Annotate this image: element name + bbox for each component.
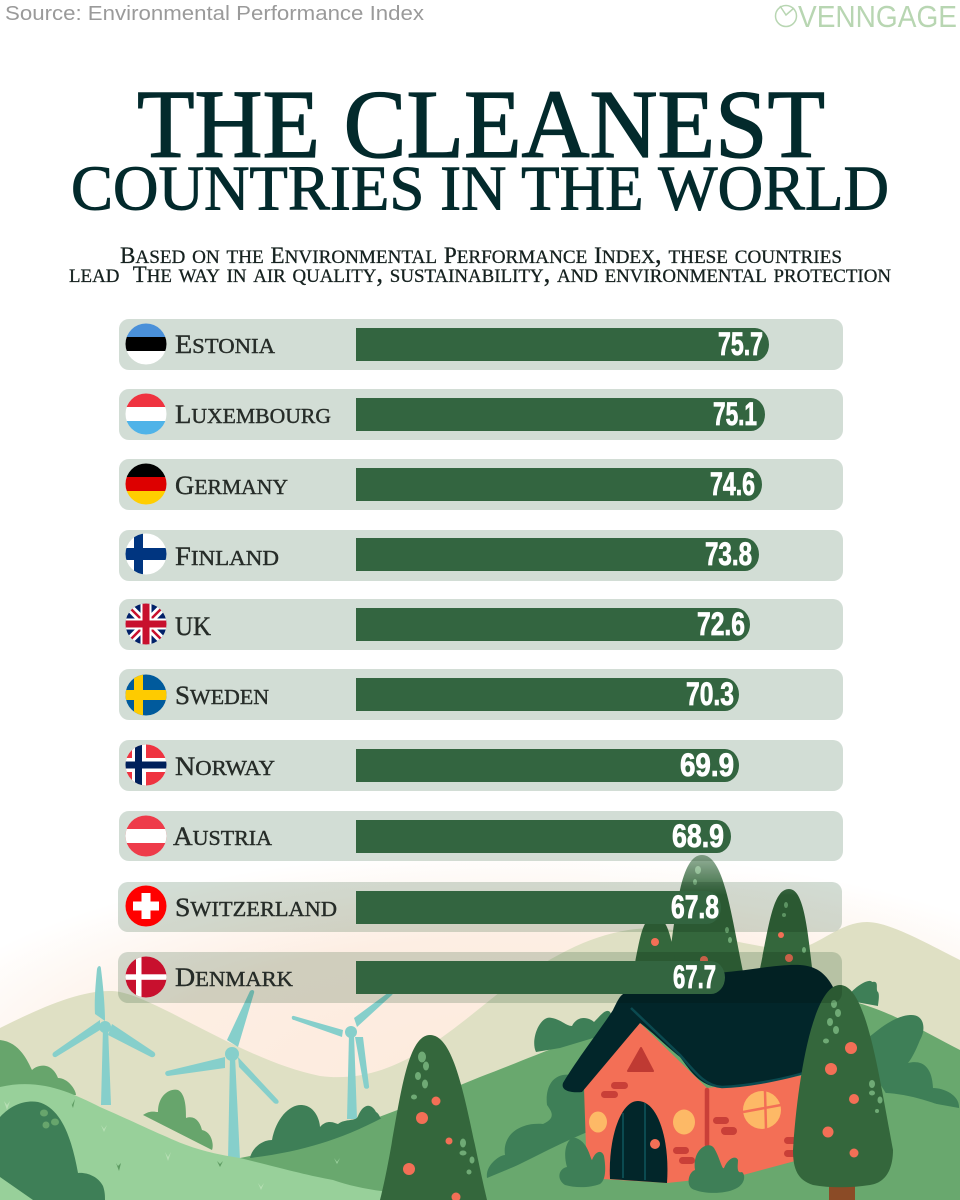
row: Switzerland: 67.8 — [671, 889, 719, 925]
bar chart — [118, 319, 843, 1003]
back bushes — [0, 1040, 76, 1095]
roof — [563, 965, 833, 1092]
foreground right hill — [400, 1093, 960, 1200]
subtitle: lead The way in air quality, sustainability, and environmental protection — [69, 258, 891, 288]
turbine 2 — [165, 990, 279, 1160]
light green front hill — [0, 1084, 400, 1200]
row: Norway: Norway — [175, 749, 275, 782]
row: Sweden: Sweden — [175, 678, 269, 711]
right front tree — [793, 985, 893, 1200]
mid green hill — [240, 1000, 960, 1200]
bricks — [601, 1082, 798, 1164]
source line: Source: Environmental Performance Index — [5, 3, 424, 25]
subtitle — [69, 239, 891, 288]
wind turbines — [53, 966, 393, 1160]
row: Austria: 68.9 — [672, 818, 724, 854]
row: Austria — [119, 811, 843, 861]
row: Germany — [119, 459, 843, 510]
row: Denmark: 67.7 — [673, 959, 716, 995]
center front tree — [380, 1035, 487, 1200]
row: Switzerland: Switzerland — [175, 890, 337, 923]
row: Estonia — [119, 319, 843, 370]
row: Switzerland — [118, 882, 842, 932]
windows — [589, 1112, 607, 1132]
grass tufts — [4, 1101, 340, 1190]
row: Estonia: 75.7 — [718, 326, 763, 362]
wall corner line — [705, 1090, 709, 1145]
row: Luxembourg — [119, 389, 843, 440]
soft fade over tree tops — [600, 850, 860, 895]
row: UK — [119, 599, 843, 650]
row: Germany: 74.6 — [710, 466, 755, 502]
right dark hill bushes — [865, 1015, 959, 1108]
dark bush behind central hill — [250, 1105, 382, 1158]
walls — [584, 1023, 810, 1183]
title: THE CLEANEST — [137, 71, 825, 178]
row: Austria: Austria — [173, 819, 273, 852]
row: Germany: Germany — [175, 468, 288, 501]
turbine 3 — [292, 991, 393, 1119]
row: Norway — [119, 740, 843, 791]
bushes behind house on left — [534, 1011, 620, 1052]
door — [610, 1101, 667, 1183]
row: Estonia: Estonia — [175, 327, 276, 360]
row: Finland — [119, 530, 843, 581]
row: Denmark — [118, 952, 842, 1003]
row: Denmark: Denmark — [175, 960, 293, 993]
turbine 1 — [53, 966, 155, 1105]
row: Sweden: 70.3 — [686, 676, 734, 712]
house — [563, 965, 833, 1183]
trees behind house — [630, 855, 815, 990]
row: Finland: 73.8 — [705, 536, 752, 572]
subtitle: Based on the Environmental Performance Index, these countries — [120, 239, 842, 269]
row: Luxembourg: Luxembourg — [175, 397, 331, 430]
row: UK: UK — [175, 612, 211, 641]
row: Finland: Finland — [175, 539, 279, 572]
row: Norway: 69.9 — [680, 747, 734, 783]
gable triangle — [628, 1048, 653, 1071]
row: Sweden — [119, 669, 843, 720]
row: Luxembourg: 75.1 — [713, 396, 757, 432]
row: UK: 72.6 — [697, 606, 745, 642]
left dark bush — [0, 1102, 105, 1200]
pale background hills — [0, 922, 960, 1200]
landscape illustration — [0, 840, 960, 1200]
title — [71, 71, 889, 224]
title: COUNTRIES IN THE WORLD — [71, 152, 889, 224]
small bushes by house — [559, 1138, 605, 1187]
